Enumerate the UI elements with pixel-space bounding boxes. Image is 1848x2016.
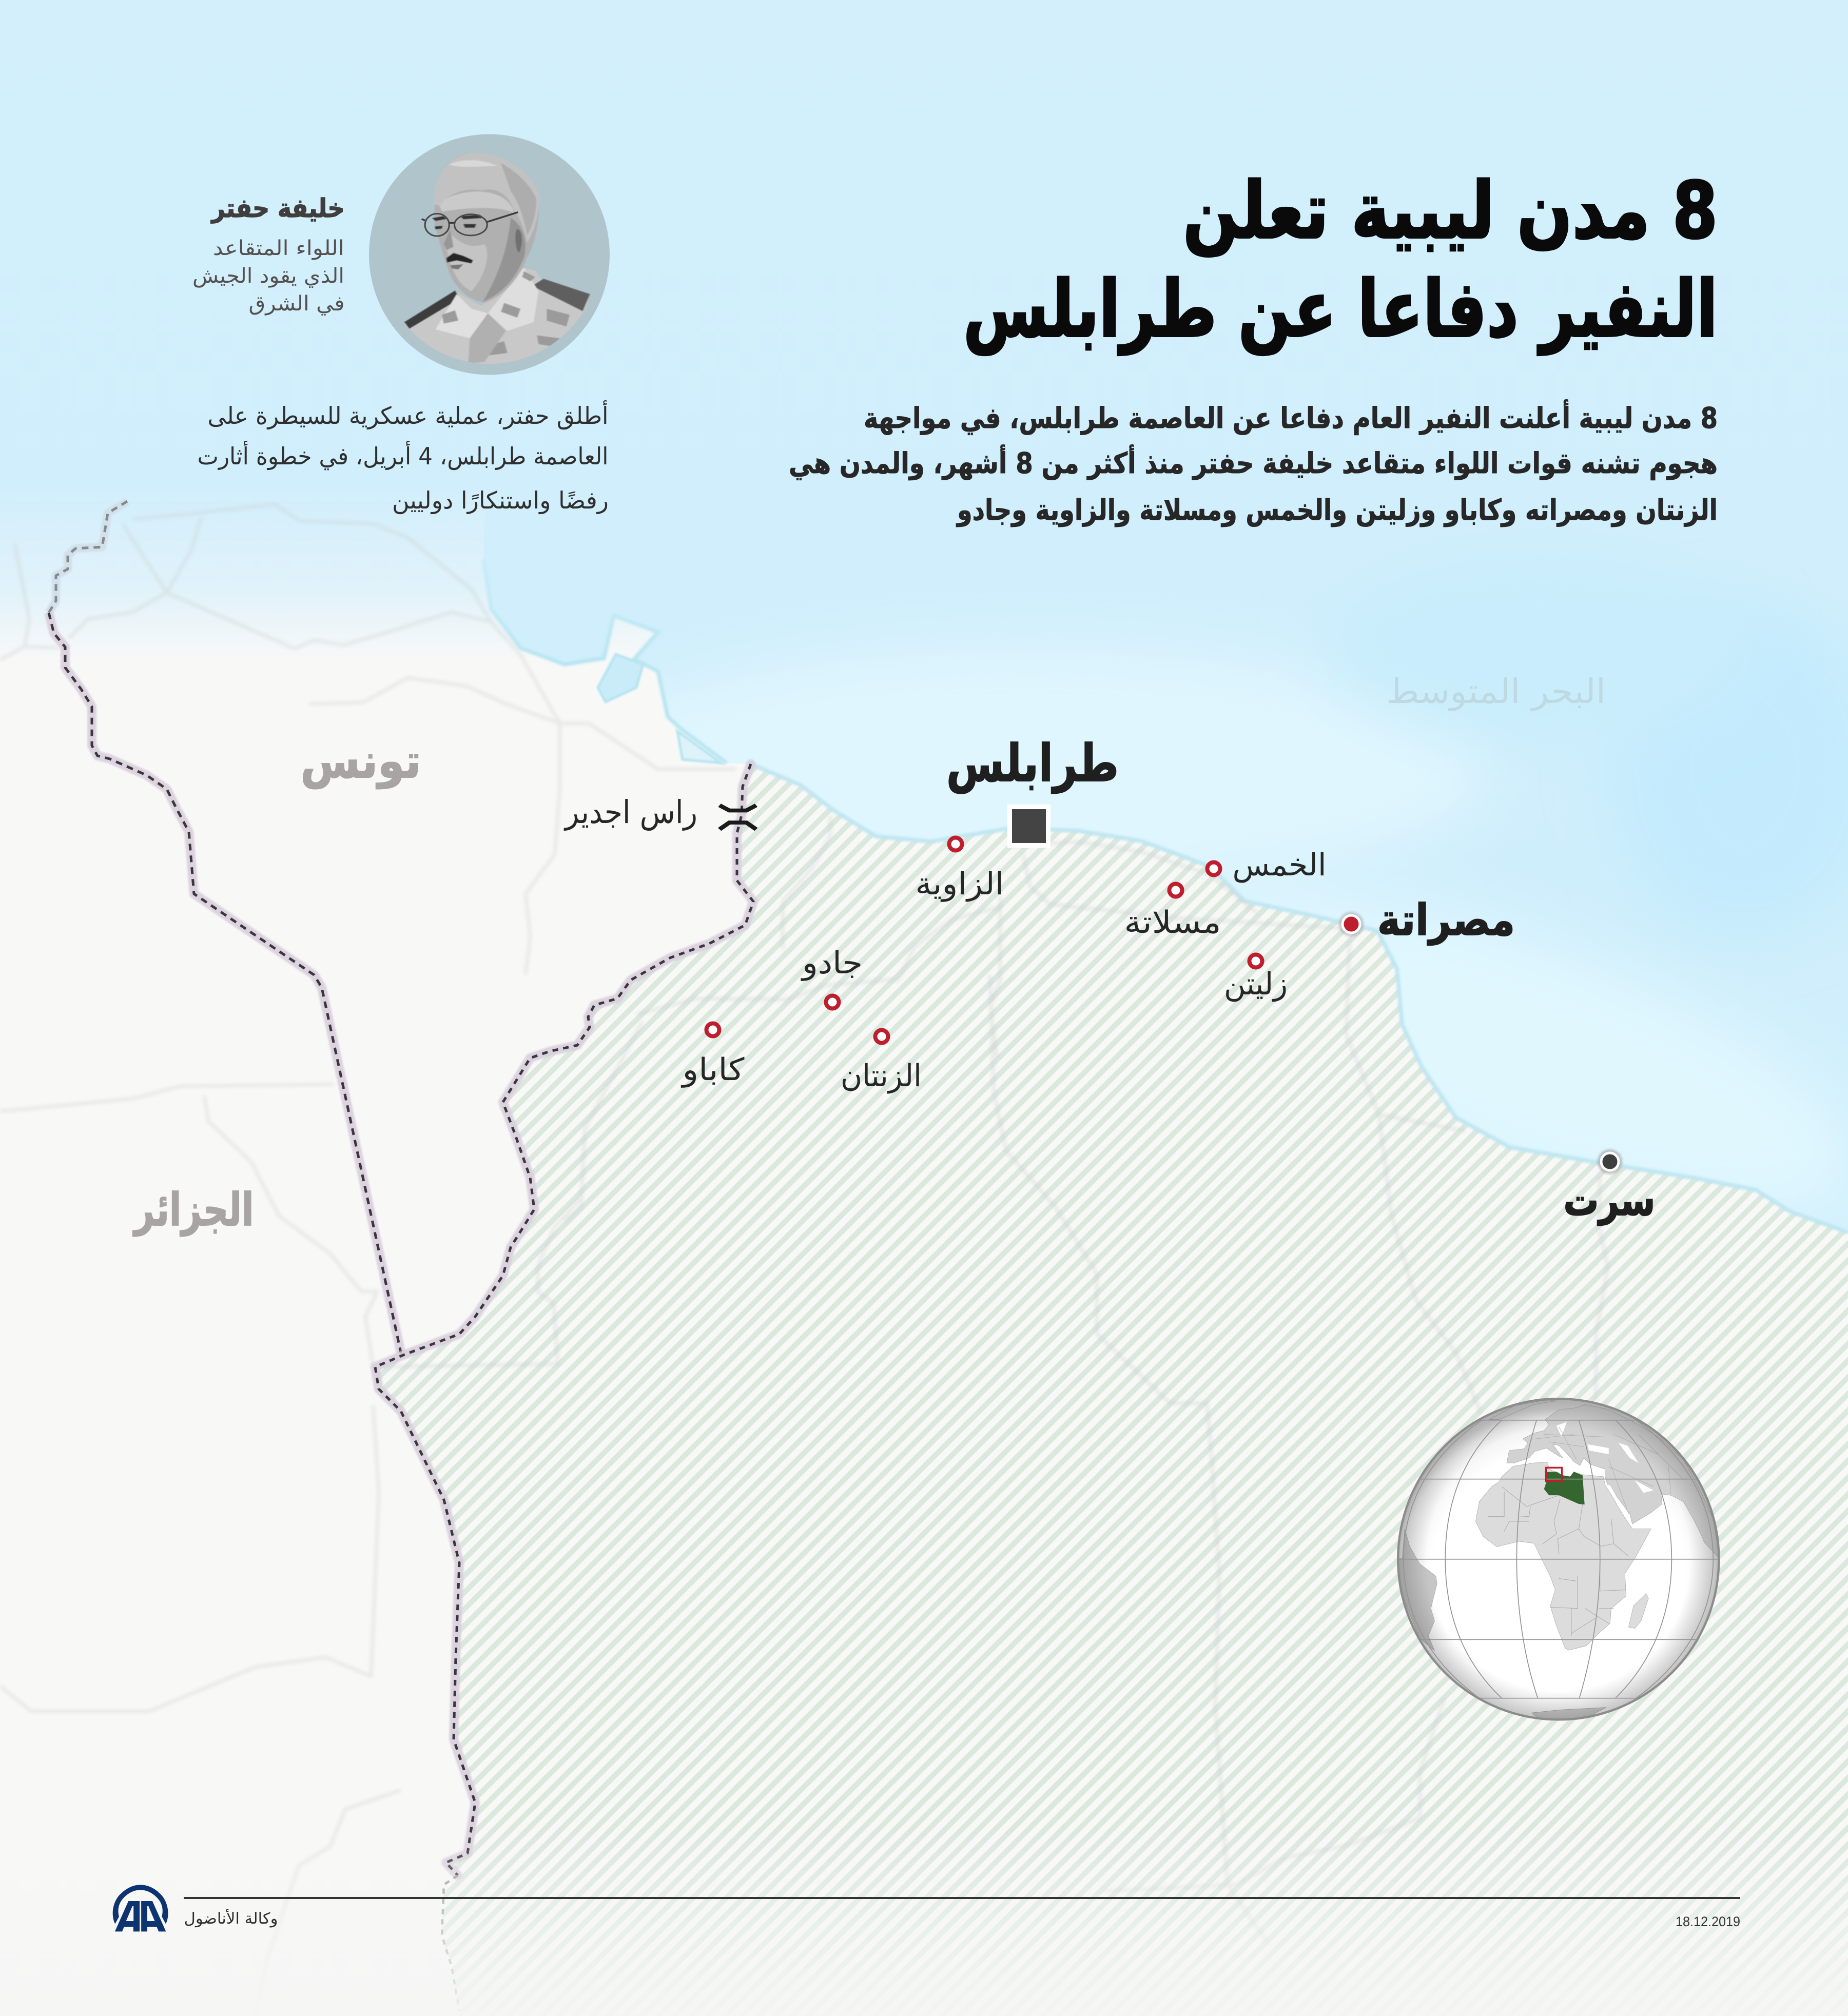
intro paragraph: 8 مدن ليبية أعلنت النفير العام دفاعا عن العاصمة طرابلس، في مواجهة (864, 399, 1718, 435)
AA logo (113, 1885, 168, 1931)
intro paragraph: الزنتان ومصراته وكاباو وزليتن والخمس ومسلاتة والزاوية وجادو (956, 494, 1718, 527)
marker: Sirte (1598, 1149, 1622, 1174)
land: Tunisia and Algeria (0, 537, 749, 1969)
marker: Misrata (1339, 912, 1364, 936)
marker: Zliten (1249, 954, 1262, 968)
label: Khums: الخمس (1233, 847, 1326, 883)
border: Tunisia and Algeria (lower) (49, 613, 401, 1355)
marker: Jadu (826, 995, 839, 1009)
marker: Zintan (876, 1030, 888, 1043)
title (963, 165, 1718, 355)
marker: Tripoli (1007, 805, 1051, 848)
source label: وكالة الأناضول (184, 1908, 278, 1928)
graticule (1397, 1420, 1720, 1698)
portrait caption: في الشرق (248, 292, 345, 316)
label: Mediterranean Sea: البحر المتوسط (1386, 672, 1606, 711)
red locator box (1546, 1467, 1562, 1481)
border: Libya west (375, 764, 753, 2011)
locator globe (1397, 1399, 1720, 1719)
intro paragraph (789, 399, 1718, 527)
date: 18.12.2019 (1676, 1914, 1740, 1929)
hatched area: Libya (375, 764, 1848, 2016)
label: Zliten: زليتن (1224, 966, 1288, 1002)
marker: Khums (1207, 862, 1220, 875)
icon: border crossing (719, 805, 756, 829)
label: Tunisia: تونس (301, 734, 421, 789)
intro paragraph: هجوم تشنه قوات اللواء متقاعد خليفة حفتر منذ أكثر من 8 أشهر، والمدن هي (789, 444, 1718, 480)
Haftar operation text: العاصمة طرابلس، 4 أبريل، في خطوة أثارت (197, 441, 609, 471)
borders (1488, 1486, 1628, 1636)
portrait caption (192, 193, 345, 316)
label: Tripoli: طرابلس (946, 733, 1119, 794)
marker: Zawiya (949, 837, 962, 851)
portrait of Khalifa Haftar (369, 134, 610, 377)
Haftar operation text: أطلق حفتر، عملية عسكرية للسيطرة على (207, 400, 609, 430)
Libya (1544, 1472, 1585, 1504)
continents (1397, 1401, 1720, 1719)
portrait caption: اللواء المتقاعد (213, 237, 344, 260)
label: Misrata: مصراتة (1377, 895, 1515, 946)
globe rim (1398, 1399, 1719, 1719)
marker: Msallata (1169, 884, 1182, 897)
roads and regional lines (0, 504, 1608, 2016)
title: 8 مدن ليبية تعلن (1183, 165, 1718, 257)
portrait caption: خليفة حفتر (210, 193, 345, 224)
footer fade (0, 1827, 1848, 2016)
footer rule (184, 1897, 1740, 1899)
label: Kabaw: كاباو (680, 1052, 745, 1088)
border: Tunisia and Algeria (upper, faded) (49, 501, 127, 613)
label: Sirte: سرت (1563, 1175, 1656, 1226)
label: Ras Ajdir: راس اجدير (563, 793, 697, 831)
limb shading (1398, 1399, 1719, 1719)
label: Zawiya: الزاوية (916, 866, 1004, 902)
label: Msallata: مسلاتة (1124, 905, 1221, 941)
label: Jadu: جادو (801, 945, 863, 981)
Haftar operation text (197, 400, 609, 515)
inland seas (1557, 1417, 1654, 1497)
portrait caption: الذي يقود الجيش (192, 264, 344, 288)
marker: Kabaw (706, 1023, 719, 1036)
Haftar operation text: رفضًا واستنكارًا دوليين (392, 486, 609, 515)
label: Algeria: الجزائر (132, 1183, 254, 1236)
label: Zintan: الزنتان (841, 1058, 922, 1094)
